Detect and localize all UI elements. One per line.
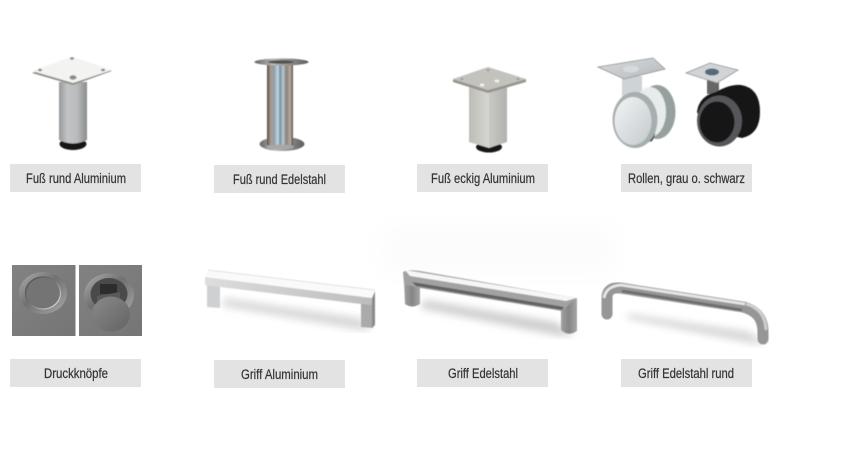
label: Druckknöpfe: Druckknöpfe [44, 366, 108, 381]
icon: black caster [686, 63, 760, 146]
label: Griff Edelstahl rund: Griff Edelstahl rund [638, 366, 734, 381]
icon: aluminium handle [205, 270, 375, 330]
background haze behind handles [380, 225, 615, 275]
icon: square aluminium foot [453, 67, 526, 152]
label: Griff Edelstahl rund [621, 359, 752, 387]
product: Griff Edelstahl [403, 270, 577, 387]
product: Rollen, grau o. schwarz [598, 58, 760, 192]
label: Rollen, grau o. schwarz [621, 164, 752, 192]
icon: stainless steel round foot [254, 58, 308, 151]
icon: grey caster [598, 58, 676, 148]
product: Griff Aluminium [205, 270, 375, 388]
label: Fuß rund Aluminium: Fuß rund Aluminium [26, 171, 126, 186]
label: Griff Aluminium [214, 360, 345, 388]
label: Rollen, grau o. schwarz: Rollen, grau o. schwarz [628, 171, 745, 186]
icon: stainless steel handle [403, 270, 577, 336]
label: Fuß eckig Aluminium: Fuß eckig Aluminium [431, 171, 535, 186]
label: Griff Edelstahl [417, 359, 548, 387]
product: Griff Edelstahl rund [604, 285, 766, 387]
label: Griff Aluminium: Griff Aluminium [241, 367, 318, 382]
icon: round stainless steel handle [604, 285, 766, 345]
product: Fuß rund Aluminium [10, 56, 141, 192]
product: Fuß rund Edelstahl [214, 58, 345, 193]
icon: push button closed [12, 265, 76, 336]
product: Druckknöpfe [10, 265, 142, 387]
product: Fuß eckig Aluminium [417, 67, 548, 192]
icon: push button open [79, 265, 142, 336]
label: Fuß rund Edelstahl: Fuß rund Edelstahl [233, 172, 326, 187]
label: Griff Edelstahl: Griff Edelstahl [448, 366, 518, 381]
icon: round aluminium foot [32, 56, 112, 150]
